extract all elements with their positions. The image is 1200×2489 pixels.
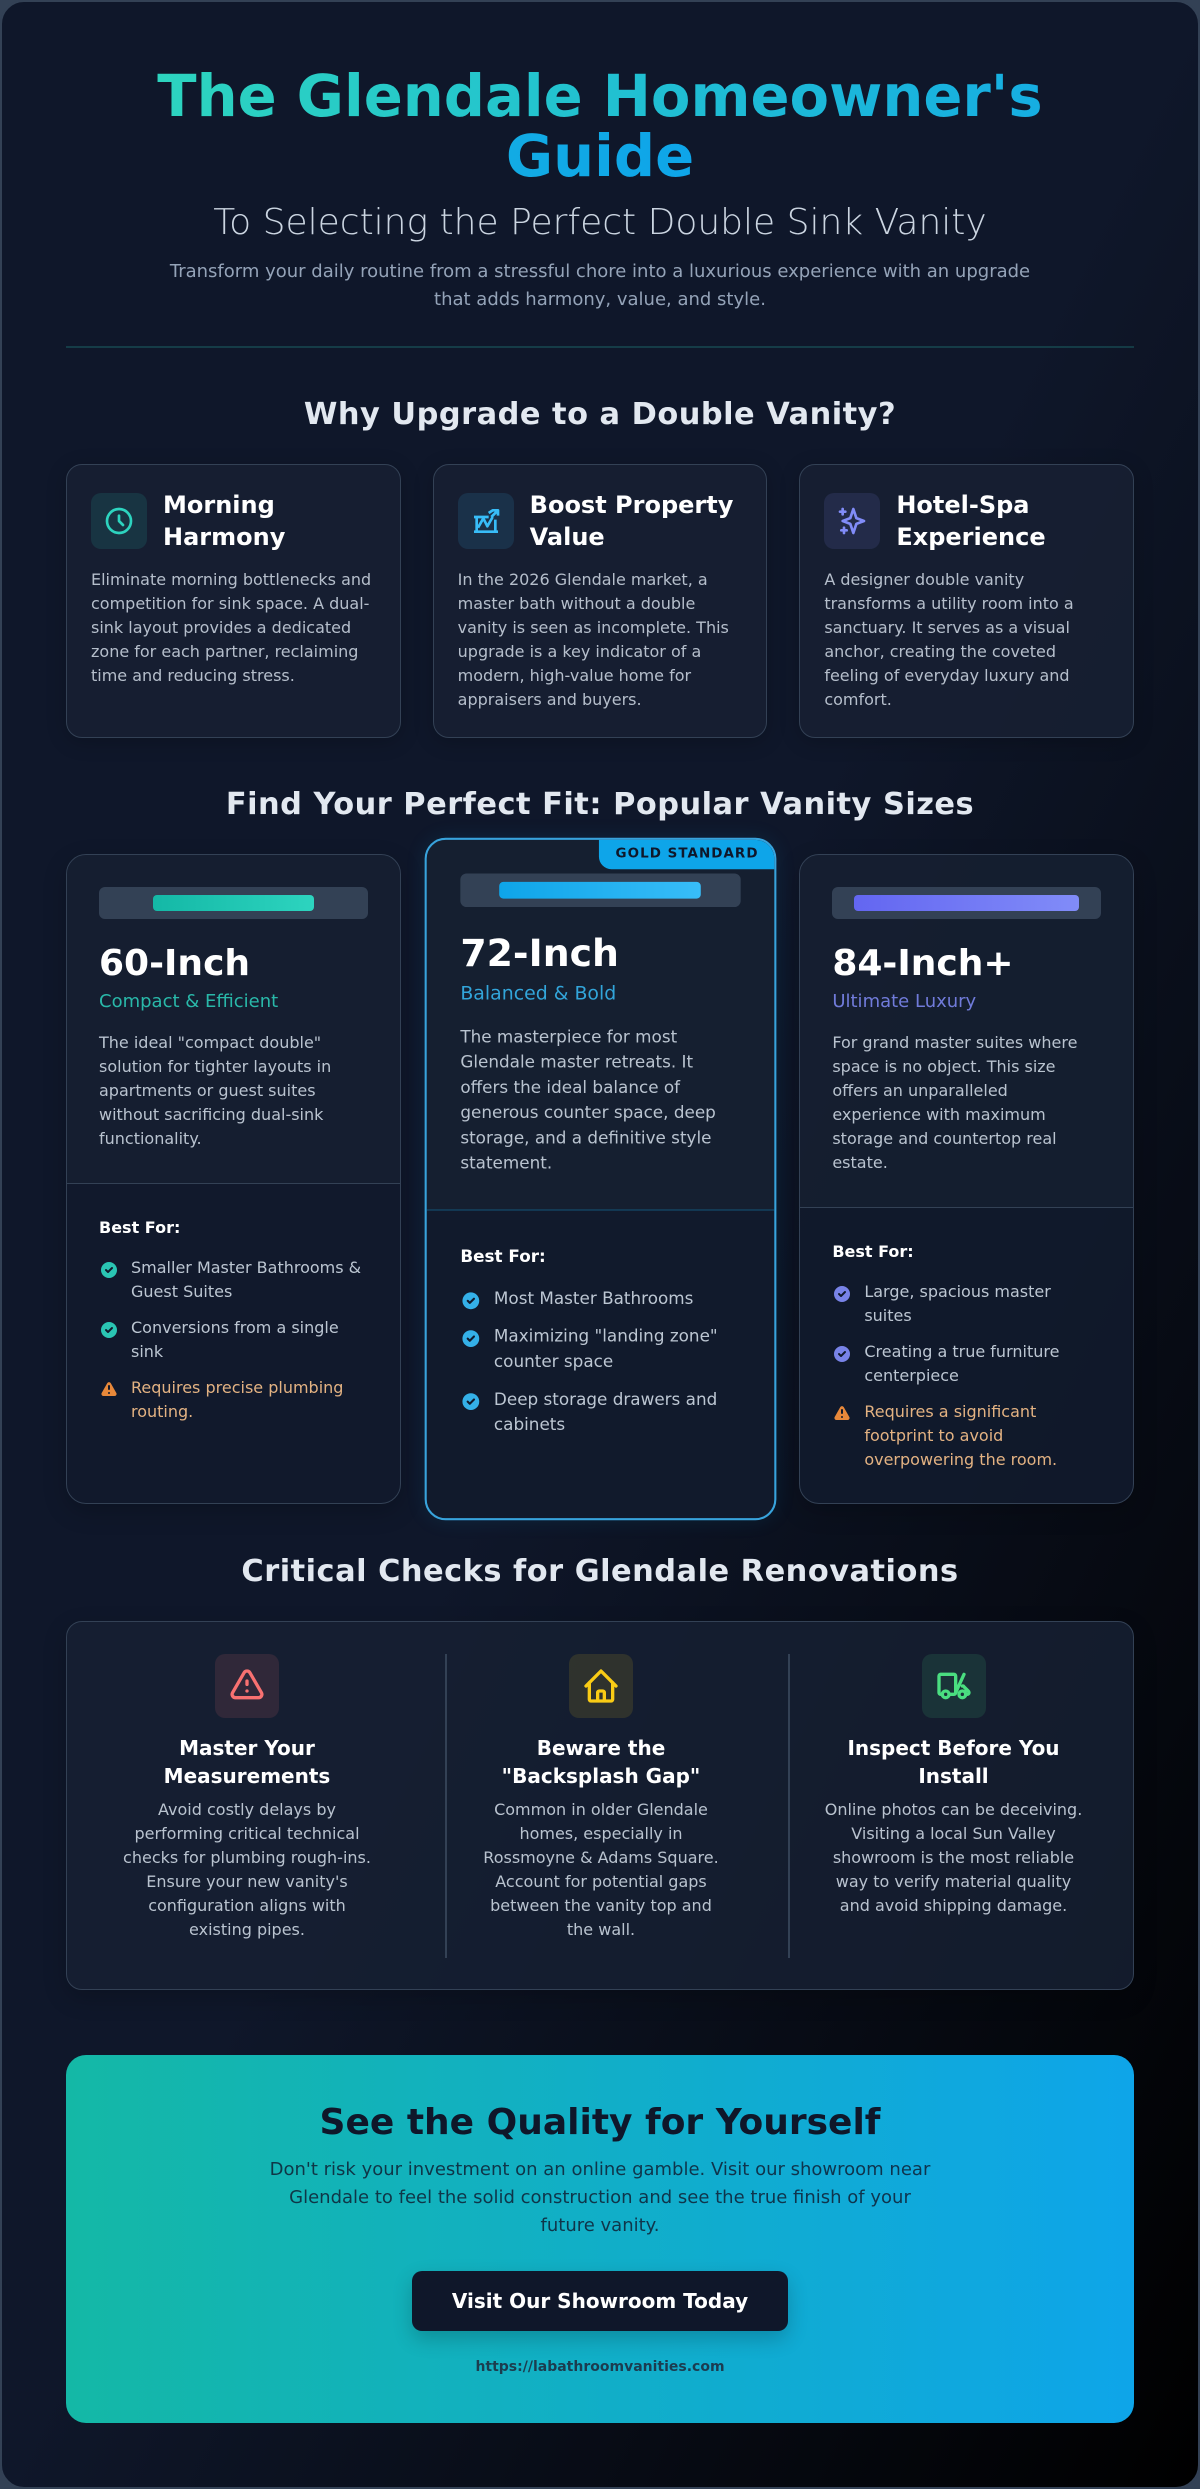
- size heading: 72-Inch: [460, 932, 619, 975]
- list item: [834, 1342, 1059, 1385]
- card text: A designer double vanity: [824, 570, 1024, 589]
- size description: without sacrificing dual-sink: [99, 1105, 323, 1124]
- cta text: Glendale to feel the solid construction and see the true finish of your: [289, 2187, 911, 2208]
- intro text: that adds harmony, value, and style.: [434, 289, 766, 310]
- warning item: [101, 1378, 343, 1421]
- cta text: Don't risk your investment on an online gamble. Visit our showroom near: [270, 2159, 930, 2180]
- list item: suites: [864, 1306, 912, 1325]
- card heading: [163, 491, 285, 551]
- card text: comfort.: [824, 690, 892, 709]
- check text: way to verify material quality: [836, 1872, 1071, 1891]
- check heading: [847, 1736, 1060, 1788]
- size description: functionality.: [99, 1129, 202, 1148]
- card heading: Boost Property: [530, 491, 733, 519]
- list item: Guest Suites: [131, 1282, 232, 1301]
- size description: [832, 1033, 1077, 1172]
- check heading: Install: [918, 1764, 989, 1788]
- check text: between the vanity top and: [490, 1896, 712, 1915]
- panel: hotel-spa experience: [799, 464, 1134, 738]
- list item: Deep storage drawers and: [494, 1389, 717, 1409]
- icon: home: [569, 1654, 633, 1718]
- size heading: 60-Inch: [99, 943, 250, 984]
- size description: storage and countertop real: [832, 1129, 1057, 1148]
- card text: transforms a utility room into a: [824, 594, 1074, 613]
- check text: Online photos can be deceiving.: [825, 1800, 1082, 1819]
- check text: showroom is the most reliable: [833, 1848, 1074, 1867]
- card text: Eliminate morning bottlenecks and: [91, 570, 371, 589]
- title: Guide: [506, 123, 694, 190]
- check text: Visiting a local Sun Valley: [851, 1824, 1056, 1843]
- check text: the wall.: [567, 1920, 635, 1939]
- check heading: [502, 1736, 700, 1788]
- list item: Creating a true furniture: [864, 1342, 1059, 1361]
- card text: zone for each partner, reclaiming: [91, 642, 358, 661]
- website url: https://labathroomvanities.com: [475, 2359, 725, 2375]
- size description: [460, 1027, 715, 1173]
- cta heading: See the Quality for Yourself: [320, 2102, 880, 2143]
- size description: statement.: [460, 1153, 552, 1173]
- list item: sink: [131, 1342, 163, 1361]
- list item: [101, 1318, 339, 1361]
- best for heading: Best For:: [832, 1242, 914, 1261]
- cta text: future vanity.: [541, 2215, 659, 2236]
- check text: and avoid shipping damage.: [840, 1896, 1067, 1915]
- list item: [834, 1282, 1051, 1325]
- cta button: [412, 2271, 788, 2331]
- check text: [483, 1800, 719, 1939]
- check text: Ensure your new vanity's: [146, 1872, 348, 1891]
- best for heading: Best For:: [99, 1218, 180, 1237]
- list item: Conversions from a single: [131, 1318, 339, 1337]
- card heading: Morning: [163, 491, 275, 519]
- panel: 72-inch vanity, highlighted: [424, 838, 776, 1520]
- size description: The masterpiece for most: [460, 1027, 677, 1047]
- check text: existing pipes.: [189, 1920, 305, 1939]
- size tagline: Compact & Efficient: [99, 991, 278, 1012]
- warning item: Requires a significant: [864, 1402, 1036, 1421]
- icon: delivery truck: [922, 1654, 986, 1718]
- card text: [91, 570, 371, 685]
- list item: counter space: [494, 1351, 613, 1371]
- card text: time and reducing stress.: [91, 666, 295, 685]
- card heading: Value: [530, 523, 605, 551]
- warning item: footprint to avoid: [864, 1426, 1003, 1445]
- list item: Large, spacious master: [864, 1282, 1051, 1301]
- size description: offers an unparalleled: [832, 1081, 1008, 1100]
- panel: 84-inch vanity: [799, 854, 1134, 1504]
- check heading: Beware the: [537, 1736, 665, 1760]
- card text: In the 2026 Glendale market, a: [458, 570, 708, 589]
- check: measurements: [123, 1654, 371, 1939]
- card heading: Harmony: [163, 523, 285, 551]
- warning item: overpowering the room.: [864, 1450, 1057, 1469]
- icon: chart: [458, 493, 514, 549]
- panel: morning harmony: [66, 464, 401, 738]
- panel: 60-inch vanity: [66, 854, 401, 1504]
- card heading: [896, 491, 1046, 551]
- badge: gold standard: GOLD STANDARD: [615, 846, 758, 862]
- icon: sparkles: [824, 493, 880, 549]
- size tagline: Ultimate Luxury: [832, 991, 976, 1012]
- check heading: Inspect Before You: [847, 1736, 1060, 1760]
- warning item: [834, 1402, 1057, 1469]
- badge: gold standard: [599, 839, 775, 869]
- list item: [462, 1389, 717, 1434]
- card text: modern, high-value home for: [458, 666, 691, 685]
- best for heading: Best For:: [460, 1246, 545, 1266]
- check text: Common in older Glendale: [494, 1800, 708, 1819]
- size description: apartments or guest suites: [99, 1081, 316, 1100]
- check: backsplash gap: [483, 1654, 719, 1939]
- size heading: 84-Inch+: [832, 943, 1014, 984]
- card text: sink layout provides a dedicated: [91, 618, 351, 637]
- card text: [458, 570, 729, 709]
- size description: [98, 1033, 331, 1148]
- card text: competition for sink space. A dual-: [91, 594, 369, 613]
- check text: checks for plumbing rough-ins.: [123, 1848, 371, 1867]
- check text: performing critical technical: [134, 1824, 360, 1843]
- size description: solution for tighter layouts in: [99, 1057, 331, 1076]
- check text: Account for potential gaps: [495, 1872, 707, 1891]
- size description: experience with maximum: [832, 1105, 1046, 1124]
- heading: why upgrade: Why Upgrade to a Double Vanity?: [304, 397, 896, 432]
- check text: [825, 1800, 1082, 1915]
- intro text: Transform your daily routine from a stressful chore into a luxurious experience with an upgrade: [170, 261, 1030, 282]
- size description: space is no object. This size: [832, 1057, 1056, 1076]
- check heading: [164, 1736, 330, 1788]
- check text: homes, especially in: [519, 1824, 683, 1843]
- check heading: Measurements: [164, 1764, 330, 1788]
- warning item: routing.: [131, 1402, 193, 1421]
- card text: vanity is seen as incomplete. This: [458, 618, 729, 637]
- card heading: Hotel-Spa: [896, 491, 1030, 519]
- size description: estate.: [832, 1153, 888, 1172]
- size description: For grand master suites where: [832, 1033, 1077, 1052]
- list item: centerpiece: [864, 1366, 959, 1385]
- card heading: [530, 491, 733, 551]
- check text: Avoid costly delays by: [158, 1800, 336, 1819]
- size description: offers the ideal balance of: [460, 1077, 680, 1097]
- check text: Rossmoyne & Adams Square.: [483, 1848, 719, 1867]
- card text: sanctuary. It serves as a visual: [824, 618, 1070, 637]
- title: [157, 63, 1043, 190]
- subtitle: To Selecting the Perfect Double Sink Vanity: [213, 202, 987, 243]
- intro text: [170, 261, 1030, 310]
- list item: Smaller Master Bathrooms &: [131, 1258, 361, 1277]
- list item: Most Master Bathrooms: [494, 1288, 693, 1308]
- check text: [123, 1800, 371, 1939]
- panel: call to action: [66, 2055, 1134, 2423]
- size description: generous counter space, deep: [460, 1102, 715, 1122]
- card text: upgrade is a key indicator of a: [458, 642, 701, 661]
- check: inspect: [825, 1654, 1082, 1915]
- heading: popular sizes: Find Your Perfect Fit: Popular Vanity Sizes: [226, 787, 974, 822]
- list item: Maximizing "landing zone": [494, 1326, 717, 1346]
- warning item: Requires precise plumbing: [131, 1378, 343, 1397]
- icon: warning triangle: [215, 1654, 279, 1718]
- card text: feeling of everyday luxury and: [824, 666, 1070, 685]
- heading: critical checks: Critical Checks for Glendale Renovations: [241, 1554, 959, 1589]
- card text: [824, 570, 1074, 709]
- cta text: [270, 2159, 930, 2236]
- card text: appraisers and buyers.: [458, 690, 642, 709]
- list item: cabinets: [494, 1414, 565, 1434]
- title: The Glendale Homeowner's: [157, 63, 1043, 130]
- list item: [101, 1258, 361, 1301]
- icon: clock: [91, 493, 147, 549]
- list item: [462, 1326, 717, 1371]
- check heading: Master Your: [179, 1736, 315, 1760]
- card text: anchor, creating the coveted: [824, 642, 1056, 661]
- size bar 84 percent: [832, 887, 1101, 919]
- card heading: Experience: [896, 523, 1046, 551]
- card text: master bath without a double: [458, 594, 695, 613]
- size bar 60 percent: [99, 887, 368, 919]
- size bar 72 percent: [460, 873, 740, 907]
- cta button: Visit Our Showroom Today: [452, 2289, 748, 2313]
- size description: storage, and a definitive style: [460, 1128, 711, 1148]
- check text: configuration aligns with: [148, 1896, 346, 1915]
- panel: critical checks: [66, 1621, 1134, 1990]
- panel: boost property value: [433, 464, 767, 738]
- size description: Glendale master retreats. It: [460, 1052, 693, 1072]
- size description: The ideal "compact double": [99, 1033, 321, 1052]
- size tagline: Balanced & Bold: [460, 983, 616, 1005]
- check heading: "Backsplash Gap": [502, 1764, 700, 1788]
